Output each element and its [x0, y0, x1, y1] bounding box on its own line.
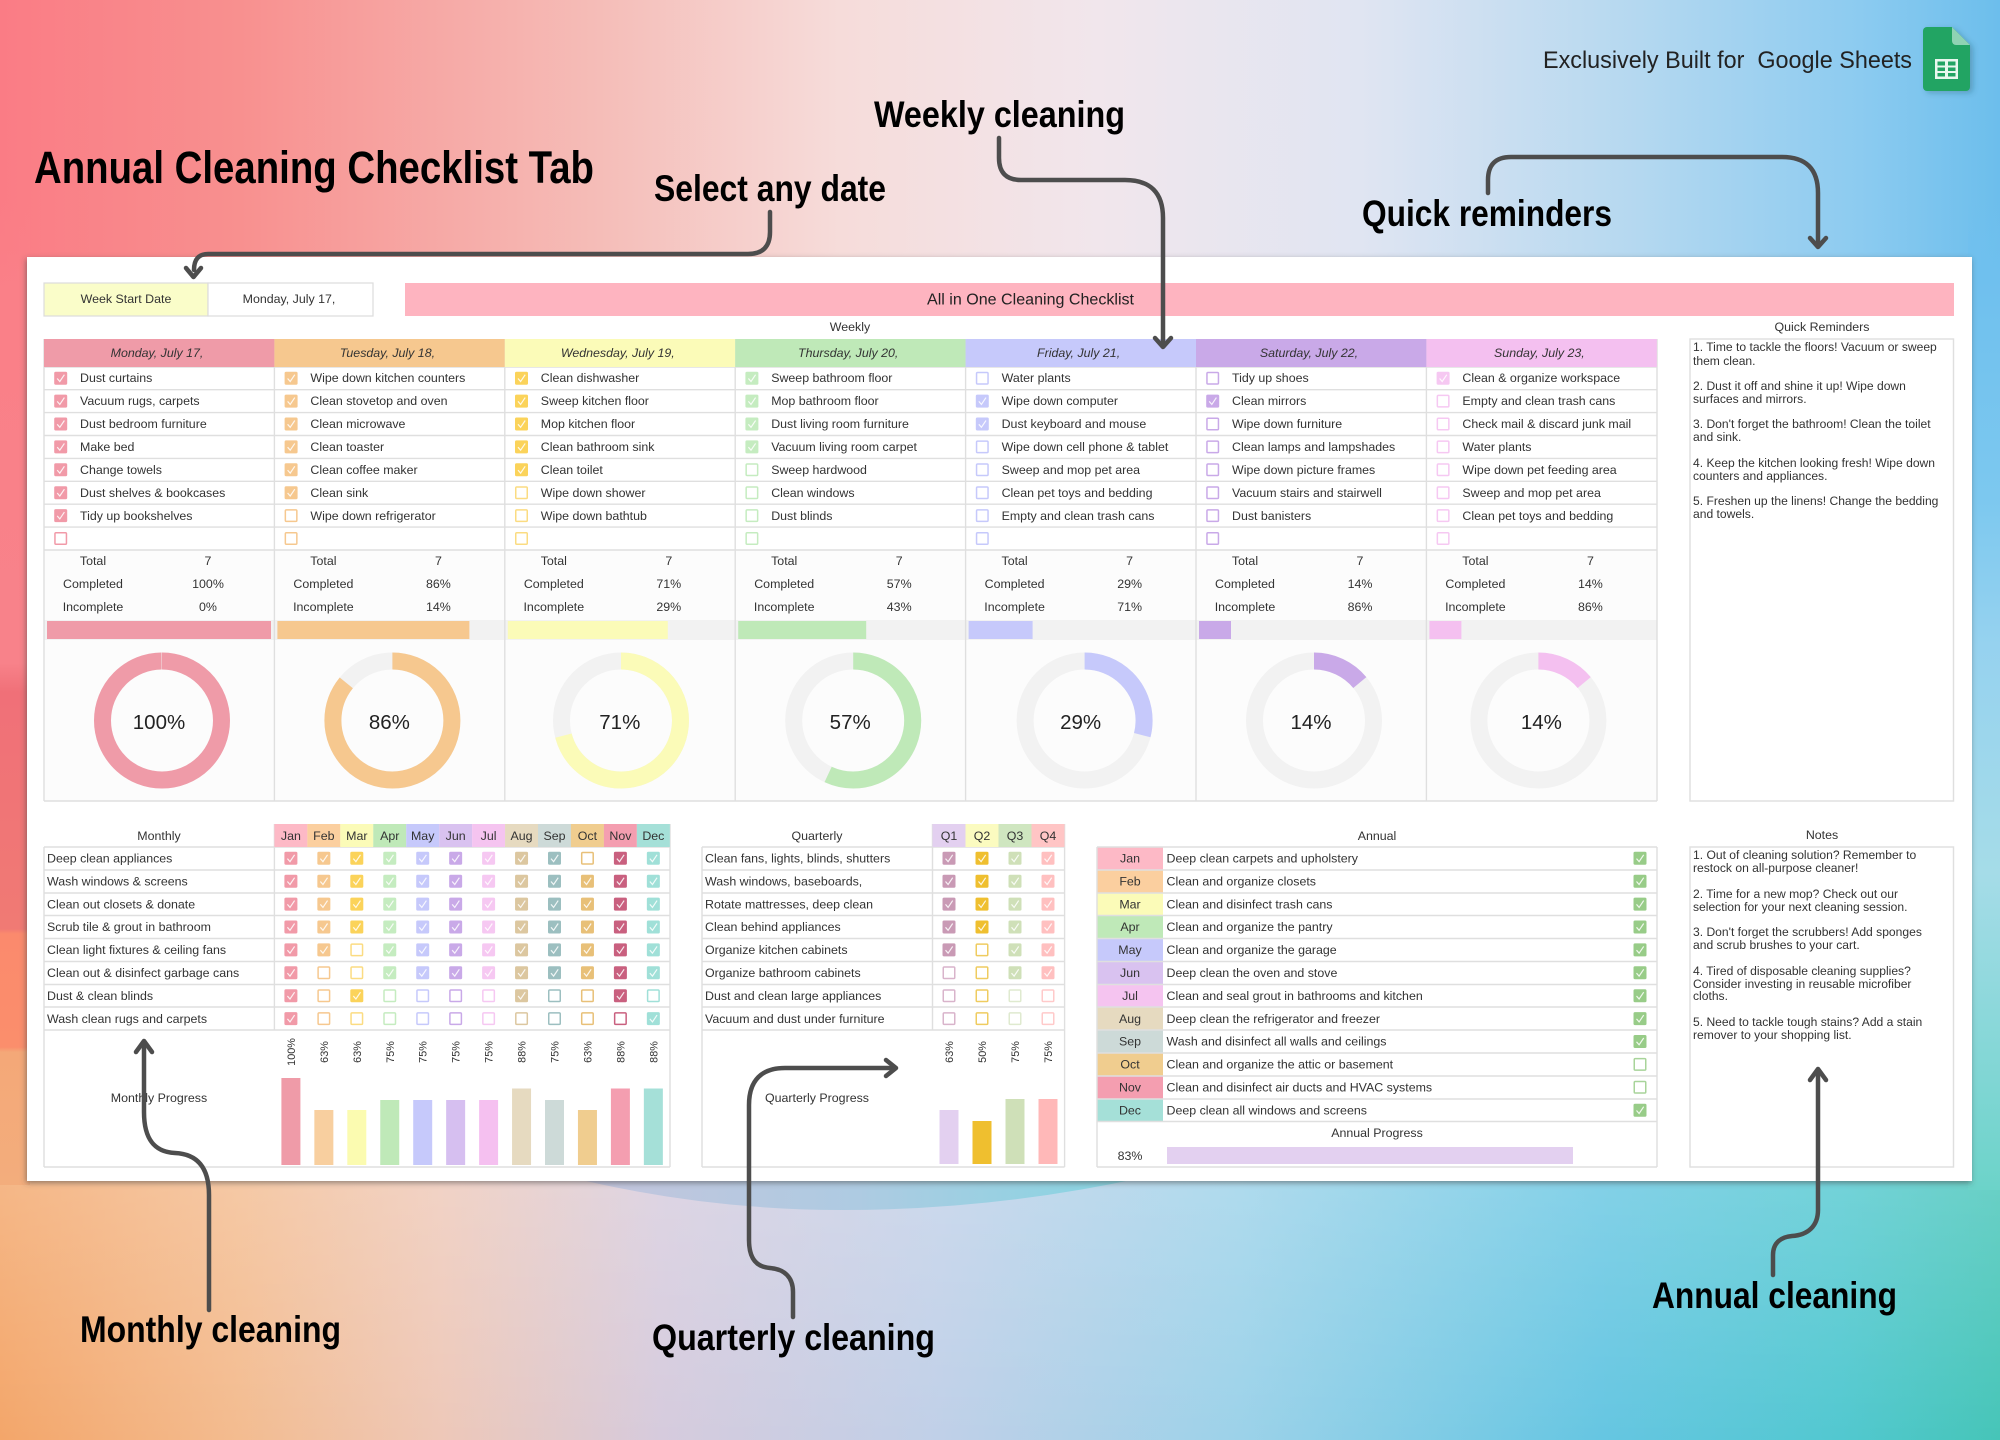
- bar chart: monthly progress: 75%: [418, 1041, 430, 1063]
- panel: quick reminders: 4. Keep the kitchen looking fresh! Wipe down: [1693, 456, 1935, 470]
- column: Friday: 71%: [1117, 600, 1142, 614]
- column: Monday: 7: [205, 554, 212, 568]
- column: Thursday: [735, 339, 966, 780]
- month colour cells: Aug: [1119, 1012, 1141, 1026]
- panel: quick reminders: Quick Reminders: [1774, 320, 1870, 334]
- month colour cells: Apr: [1120, 920, 1140, 934]
- annual task labels: Clean and seal grout in bathrooms and kitchen: [1166, 989, 1423, 1003]
- column: Friday: 7: [1126, 554, 1133, 568]
- quarterly task labels: Clean behind appliances: [705, 920, 841, 934]
- annual task labels: Wash and disinfect all walls and ceilings: [1166, 1035, 1386, 1049]
- panel: notes: Notes: [1806, 828, 1838, 842]
- panel: notes: [1690, 828, 1954, 1167]
- column: Wednesday: Clean toilet: [541, 463, 603, 477]
- panel: notes: 5. Need to tackle tough stains? Add a stain: [1693, 1015, 1922, 1029]
- column: Wednesday: 71%: [599, 711, 640, 734]
- column: Thursday: Completed: [754, 577, 814, 591]
- column: Monday: 0%: [199, 600, 217, 614]
- month colour cells: May: [1118, 943, 1143, 957]
- column: Friday: Total: [1002, 554, 1028, 568]
- monthly task labels: [47, 852, 239, 1026]
- quarter headers: Q2: [974, 829, 990, 843]
- column: Friday: Sweep and mop pet area: [1002, 463, 1140, 477]
- column: Tuesday: [274, 339, 505, 780]
- column: Thursday: Thursday, July 20,: [798, 346, 898, 360]
- quarter headers: Q4: [1040, 829, 1056, 843]
- panel: quarterly: [702, 824, 1065, 1167]
- column: Saturday: Wipe down furniture: [1232, 417, 1342, 431]
- arrow: quick reminders: [1488, 157, 1826, 247]
- annual task labels: Clean and disinfect trash cans: [1166, 897, 1332, 911]
- column: Thursday: 57%: [830, 711, 871, 734]
- bar chart: monthly progress: 75%: [484, 1041, 496, 1063]
- month headers: Dec: [642, 829, 664, 843]
- quarter headers: [932, 824, 1064, 847]
- quarterly task labels: [705, 852, 890, 1026]
- column: Tuesday: Wipe down kitchen counters: [310, 371, 465, 385]
- bar chart: monthly progress: 63%: [319, 1041, 331, 1063]
- column: Saturday: Completed: [1215, 577, 1275, 591]
- column: Saturday: Tidy up shoes: [1232, 371, 1309, 385]
- icon: Google Sheets: [1923, 27, 1970, 91]
- column: Friday: Wipe down computer: [1002, 394, 1118, 408]
- callout label: quarterly cleaning: Quarterly cleaning: [652, 1317, 935, 1358]
- month headers: Apr: [380, 829, 399, 843]
- column: Saturday: 86%: [1348, 600, 1372, 614]
- bar chart: quarterly progress: 63%: [944, 1041, 956, 1063]
- column: Sunday: Clean & organize workspace: [1462, 371, 1620, 385]
- arrow: select any date: [186, 212, 770, 277]
- month colour cells: [1097, 847, 1163, 1122]
- bar chart: quarterly progress: 75%: [1010, 1041, 1022, 1063]
- panel: notes: cloths.: [1693, 989, 1728, 1003]
- column: Sunday: Empty and clean trash cans: [1462, 394, 1615, 408]
- label: exclusively built for Google Sheets: Exclusively Built for Google Sheets: [1543, 47, 1912, 74]
- panel: quick reminders: surfaces and mirrors.: [1693, 392, 1807, 406]
- column: Thursday: Dust living room furniture: [771, 417, 909, 431]
- panel: quick reminders: 2. Dust it off and shine it up! Wipe down: [1693, 379, 1906, 393]
- column: Wednesday: Total: [541, 554, 567, 568]
- annual progress bar: [1118, 1126, 1573, 1164]
- month headers: Jun: [446, 829, 466, 843]
- column: Sunday: Check mail & discard junk mail: [1462, 417, 1631, 431]
- month headers: Sep: [543, 829, 566, 843]
- column: Tuesday: 14%: [426, 600, 451, 614]
- week start date selector: Week Start Date: [81, 292, 171, 306]
- column: Saturday: 14%: [1348, 577, 1372, 591]
- column: Sunday: Sunday, July 23,: [1494, 346, 1585, 360]
- bar chart: quarterly progress: [940, 1041, 1058, 1164]
- bar chart: monthly progress: 63%: [352, 1041, 364, 1063]
- column: Friday: Friday, July 21,: [1037, 346, 1120, 360]
- callout label: quick reminders: Quick reminders: [1362, 193, 1612, 234]
- column: Tuesday: 86%: [369, 711, 410, 734]
- column: Wednesday: Sweep kitchen floor: [541, 394, 649, 408]
- column: Monday: Monday, July 17,: [111, 346, 203, 360]
- annual task labels: Clean and organize the garage: [1166, 943, 1337, 957]
- month colour cells: Oct: [1120, 1058, 1140, 1072]
- week start date selector: [44, 283, 373, 316]
- title: Annual Cleaning Checklist Tab: [34, 142, 594, 193]
- column: Saturday: Saturday, July 22,: [1260, 346, 1358, 360]
- column: Monday: [44, 339, 274, 780]
- month headers: Oct: [578, 829, 598, 843]
- bar chart: quarterly progress: 75%: [1043, 1041, 1055, 1063]
- panel: notes: Consider investing in reusable microfiber: [1693, 977, 1911, 991]
- column: Sunday: Completed: [1445, 577, 1505, 591]
- month headers: Mar: [346, 829, 367, 843]
- column: Sunday: 14%: [1521, 711, 1562, 734]
- month colour cells: Jul: [1122, 989, 1138, 1003]
- column: Thursday: Incomplete: [754, 600, 815, 614]
- monthly task labels: Wash windows & screens: [47, 874, 188, 888]
- column: Tuesday: 7: [435, 554, 442, 568]
- month colour cells: Feb: [1119, 874, 1141, 888]
- arrow: quarterly cleaning: [749, 1060, 896, 1317]
- column: Friday: 29%: [1117, 577, 1142, 591]
- panel: quick reminders: and sink.: [1693, 430, 1741, 444]
- monthly task labels: Clean out & disinfect garbage cans: [47, 966, 239, 980]
- column: Tuesday: Clean sink: [310, 486, 369, 500]
- heading: annual: Annual: [1358, 829, 1396, 843]
- column: Sunday: Sweep and mop pet area: [1462, 486, 1601, 500]
- banner: all in one cleaning checklist: [405, 283, 1954, 316]
- column: Monday: Dust bedroom furniture: [80, 417, 207, 431]
- annual task labels: Deep clean the oven and stove: [1166, 966, 1337, 980]
- column: Friday: Water plants: [1002, 371, 1071, 385]
- panel: notes: 3. Don't forget the scrubbers! Add sponges: [1693, 925, 1922, 939]
- column: Wednesday: Completed: [524, 577, 584, 591]
- column: Wednesday: 7: [665, 554, 672, 568]
- bar chart: monthly progress: 63%: [582, 1041, 594, 1063]
- month colour cells: Dec: [1119, 1103, 1141, 1117]
- monthly task labels: Clean out closets & donate: [47, 897, 195, 911]
- column: Monday: 100%: [133, 711, 185, 734]
- column: Wednesday: 29%: [656, 600, 681, 614]
- column: Thursday: Clean windows: [771, 486, 855, 500]
- quarter headers: Q3: [1007, 829, 1023, 843]
- column: Tuesday: 86%: [426, 577, 451, 591]
- bar chart: monthly progress: 88%: [517, 1041, 529, 1063]
- column: Sunday: 14%: [1578, 577, 1603, 591]
- column: Sunday: Incomplete: [1445, 600, 1506, 614]
- panel: annual: [1097, 829, 1657, 1167]
- column: Friday: Clean pet toys and bedding: [1002, 486, 1153, 500]
- column: Thursday: Sweep hardwood: [771, 463, 867, 477]
- month headers: Aug: [511, 829, 533, 843]
- quarter headers: Q1: [941, 829, 957, 843]
- annual task labels: Clean and organize the attic or basement: [1166, 1058, 1394, 1072]
- bar chart: monthly progress: 75%: [451, 1041, 463, 1063]
- heading: quarterly: Quarterly: [792, 829, 843, 843]
- column: Monday: Total: [80, 554, 106, 568]
- bar chart: monthly progress: 88%: [648, 1041, 660, 1063]
- arrow: annual cleaning: [1773, 1069, 1826, 1275]
- quarterly task labels: Organize bathroom cabinets: [705, 966, 861, 980]
- column: Sunday: Total: [1462, 554, 1488, 568]
- panel: notes: restock on all-purpose cleaner!: [1693, 861, 1858, 875]
- panel: quick reminders: and towels.: [1693, 507, 1754, 521]
- column: Thursday: 43%: [887, 600, 912, 614]
- column: Monday: Vacuum rugs, carpets: [80, 394, 200, 408]
- column: Saturday: Incomplete: [1215, 600, 1275, 614]
- annual task labels: Deep clean all windows and screens: [1166, 1103, 1367, 1117]
- column: Wednesday: Clean dishwasher: [541, 371, 639, 385]
- column: Monday: Dust curtains: [80, 371, 152, 385]
- month headers: Jul: [481, 829, 497, 843]
- monthly task labels: Deep clean appliances: [47, 852, 172, 866]
- column: Saturday: Dust banisters: [1232, 509, 1311, 523]
- panel: notes: and scrub brushes to your cart.: [1693, 938, 1860, 952]
- column: Saturday: Wipe down picture frames: [1232, 463, 1375, 477]
- quarterly task labels: Organize kitchen cabinets: [705, 943, 848, 957]
- banner: all in one cleaning checklist: All in One Cleaning Checklist: [927, 292, 1135, 308]
- panel: notes: 1. Out of cleaning solution? Remember to: [1693, 848, 1916, 862]
- column: Saturday: Vacuum stairs and stairwell: [1232, 486, 1382, 500]
- panel: notes: 4. Tired of disposable cleaning supplies?: [1693, 964, 1911, 978]
- arrow: monthly cleaning: [136, 1041, 209, 1310]
- column: Tuesday: Clean microwave: [310, 417, 406, 431]
- month headers: Nov: [609, 829, 632, 843]
- quarterly task labels: Clean fans, lights, blinds, shutters: [705, 852, 890, 866]
- quarterly task labels: Rotate mattresses, deep clean: [705, 897, 873, 911]
- monthly task labels: Clean light fixtures & ceiling fans: [47, 943, 226, 957]
- panel: quick reminders: 5. Freshen up the linens! Change the bedding: [1693, 494, 1938, 508]
- column: Monday: Dust shelves & bookcases: [80, 486, 225, 500]
- heading: monthly: Monthly: [137, 829, 181, 843]
- annual progress bar: Annual Progress: [1331, 1126, 1423, 1140]
- annual checkboxes: [1634, 852, 1646, 1117]
- column: Tuesday: Clean toaster: [310, 440, 384, 454]
- monthly task labels: Dust & clean blinds: [47, 989, 153, 1003]
- panel: quick reminders: 3. Don't forget the bathroom! Clean the toilet: [1693, 417, 1931, 431]
- column: Friday: 29%: [1060, 711, 1101, 734]
- column: Tuesday: Clean stovetop and oven: [310, 394, 448, 408]
- column: Thursday: Mop bathroom floor: [771, 394, 879, 408]
- column: Monday: Make bed: [80, 440, 135, 454]
- annual progress bar: 83%: [1118, 1149, 1142, 1163]
- column: Friday: Wipe down cell phone & tablet: [1002, 440, 1169, 454]
- column: Sunday: Wipe down pet feeding area: [1462, 463, 1617, 477]
- column: Monday: Incomplete: [63, 600, 123, 614]
- column: Wednesday: Wipe down shower: [541, 486, 645, 500]
- column: Wednesday: Wipe down bathtub: [541, 509, 647, 523]
- column: Monday: 100%: [192, 577, 224, 591]
- column: Friday: Incomplete: [984, 600, 1045, 614]
- monthly task labels: Scrub tile & grout in bathroom: [47, 920, 211, 934]
- month colour cells: Nov: [1119, 1080, 1142, 1094]
- bar chart: monthly progress: [281, 1038, 663, 1165]
- column: Tuesday: Incomplete: [293, 600, 354, 614]
- column: Sunday: 86%: [1578, 600, 1603, 614]
- month colour cells: Mar: [1119, 897, 1141, 911]
- column: Saturday: [1196, 339, 1426, 780]
- month headers: [274, 824, 670, 847]
- monthly checkboxes: [284, 852, 660, 1025]
- month colour cells: Jan: [1120, 852, 1140, 866]
- annual task labels: Clean and organize closets: [1166, 874, 1316, 888]
- column: Friday: Empty and clean trash cans: [1002, 509, 1155, 523]
- column: Tuesday: Wipe down refrigerator: [310, 509, 436, 523]
- column: Sunday: Clean pet toys and bedding: [1462, 509, 1613, 523]
- annual task labels: Clean and organize the pantry: [1166, 920, 1333, 934]
- arrow: weekly cleaning: [999, 138, 1171, 347]
- bar chart: monthly progress: 100%: [286, 1038, 298, 1066]
- annual task labels: [1166, 852, 1432, 1117]
- panel: notes: 2. Time for a new mop? Check out our: [1693, 887, 1898, 901]
- quarterly task labels: Dust and clean large appliances: [705, 989, 881, 1003]
- callout label: weekly cleaning: Weekly cleaning: [874, 94, 1125, 135]
- month headers: Jan: [281, 829, 301, 843]
- panel: quick reminders: [1690, 320, 1954, 801]
- column: Saturday: Total: [1232, 554, 1258, 568]
- bar chart: monthly progress: 88%: [615, 1041, 627, 1063]
- bar chart: monthly progress: 75%: [385, 1041, 397, 1063]
- main checklist panel: [27, 257, 1972, 1181]
- quarterly task labels: Wash windows, baseboards,: [705, 874, 862, 888]
- panel: notes: remover to your shopping list.: [1693, 1028, 1852, 1042]
- column: Tuesday: Clean coffee maker: [310, 463, 418, 477]
- column: Thursday: 57%: [887, 577, 912, 591]
- column: Thursday: Sweep bathroom floor: [771, 371, 892, 385]
- column: Wednesday: 71%: [656, 577, 681, 591]
- label: monthly progress: Monthly Progress: [111, 1091, 207, 1105]
- annual task labels: Deep clean carpets and upholstery: [1166, 852, 1359, 866]
- column: Friday: Completed: [985, 577, 1045, 591]
- column: Friday: [966, 339, 1196, 780]
- week start date selector: Monday, July 17,: [243, 292, 335, 306]
- column: Tuesday: Completed: [293, 577, 353, 591]
- month headers: Feb: [313, 829, 335, 843]
- panel: quick reminders: counters and appliances.: [1693, 469, 1827, 483]
- column: Saturday: Clean lamps and lampshades: [1232, 440, 1395, 454]
- column: Thursday: Dust blinds: [771, 509, 832, 523]
- column: Tuesday: Total: [310, 554, 336, 568]
- annual task labels: Clean and disinfect air ducts and HVAC systems: [1166, 1080, 1432, 1094]
- panel: quick reminders: them clean.: [1693, 354, 1756, 368]
- bar chart: quarterly progress: 50%: [977, 1041, 989, 1063]
- callout label: monthly cleaning: Monthly cleaning: [80, 1309, 341, 1350]
- panel: monthly: [44, 824, 670, 1167]
- column: Thursday: Vacuum living room carpet: [771, 440, 918, 454]
- callout label: select any date: Select any date: [654, 168, 886, 209]
- column: Monday: Completed: [63, 577, 123, 591]
- heading: weekly: Weekly: [830, 320, 871, 334]
- column: Saturday: 7: [1357, 554, 1364, 568]
- column: Wednesday: Wednesday, July 19,: [561, 346, 675, 360]
- column: Sunday: 7: [1587, 554, 1594, 568]
- column: Monday: Tidy up bookshelves: [80, 509, 192, 523]
- column: Sunday: Water plants: [1462, 440, 1531, 454]
- column: Friday: Dust keyboard and mouse: [1002, 417, 1146, 431]
- month headers: May: [411, 829, 435, 843]
- column: Saturday: Clean mirrors: [1232, 394, 1306, 408]
- panel: quick reminders: 1. Time to tackle the floors! Vacuum or sweep: [1693, 340, 1937, 354]
- bar chart: monthly progress: 75%: [550, 1041, 562, 1063]
- panel: notes: selection for your next cleaning session.: [1693, 900, 1907, 914]
- monthly task labels: Wash clean rugs and carpets: [47, 1012, 207, 1026]
- month colour cells: Jun: [1120, 966, 1140, 980]
- column: Thursday: 7: [896, 554, 903, 568]
- column: Tuesday: Tuesday, July 18,: [340, 346, 435, 360]
- column: Thursday: Total: [771, 554, 797, 568]
- annual task labels: Deep clean the refrigerator and freezer: [1166, 1012, 1380, 1026]
- column: Wednesday: [505, 339, 735, 780]
- column: Saturday: 14%: [1290, 711, 1332, 734]
- column: Wednesday: Clean bathroom sink: [541, 440, 655, 454]
- callout label: annual cleaning: Annual cleaning: [1652, 1275, 1897, 1316]
- quarterly checkboxes: [942, 852, 1054, 1024]
- label: quarterly progress: Quarterly Progress: [765, 1091, 869, 1105]
- column: Wednesday: Incomplete: [523, 600, 584, 614]
- quarterly task labels: Vacuum and dust under furniture: [705, 1012, 885, 1026]
- month colour cells: Sep: [1119, 1035, 1141, 1049]
- column: Wednesday: Mop kitchen floor: [541, 417, 635, 431]
- column: Monday: Change towels: [80, 463, 162, 477]
- column: Sunday: [1426, 339, 1657, 780]
